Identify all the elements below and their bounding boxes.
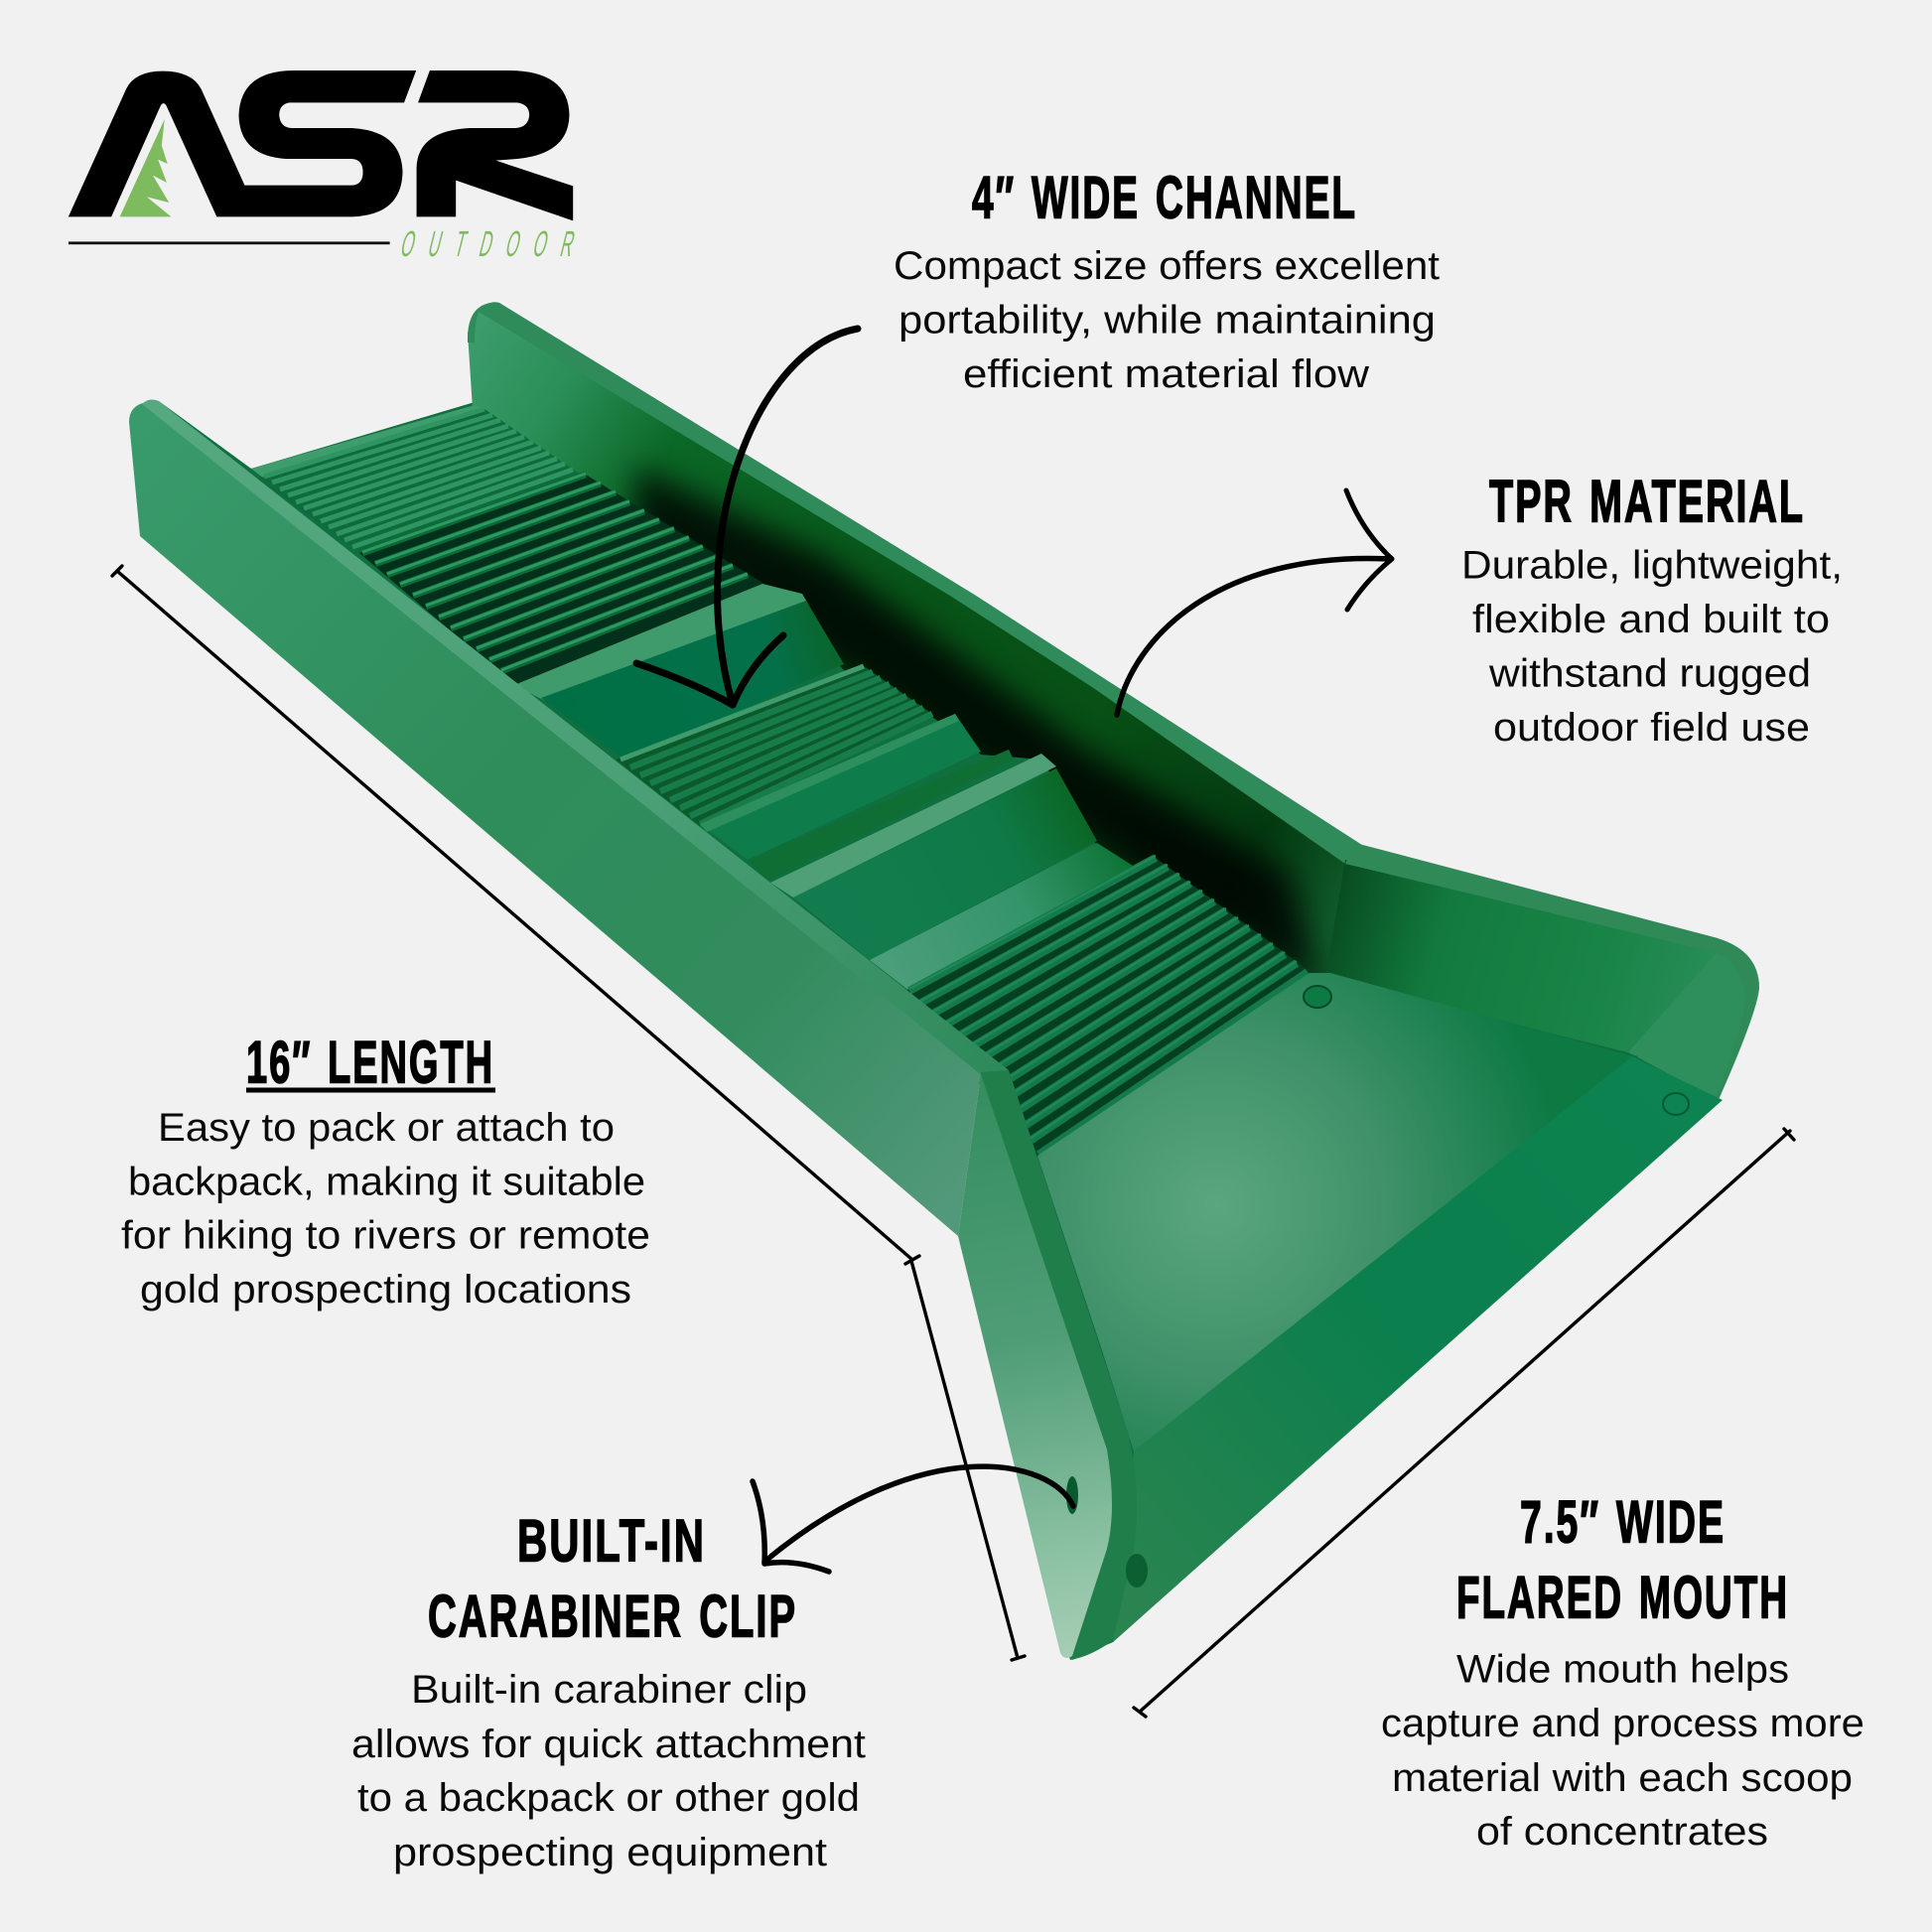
riffle section 2 bbox=[359, 474, 764, 685]
back edge strip bbox=[251, 405, 484, 479]
step strip after section 2 bbox=[514, 584, 809, 701]
description: Easy to pack or attach to bbox=[158, 1106, 615, 1150]
logo letters A and S bbox=[69, 70, 416, 216]
floor base bbox=[238, 405, 1638, 1459]
thin riffle bar bbox=[748, 750, 1014, 881]
mouth floor bbox=[1037, 973, 1632, 1451]
light step bbox=[870, 843, 1133, 991]
far wall end cap bbox=[1628, 946, 1759, 1100]
icon: green pine tree bbox=[120, 119, 171, 216]
description bbox=[351, 1668, 866, 1874]
callout: 4 inch wide channel bbox=[894, 165, 1440, 396]
description bbox=[1381, 1648, 1864, 1854]
measure line: carabiner side bbox=[911, 1261, 1025, 1660]
riffle section 3 bbox=[616, 666, 932, 826]
description: backpack, making it suitable bbox=[128, 1160, 645, 1203]
sluice silhouette base bbox=[159, 303, 1759, 1660]
floor rivet left bbox=[1304, 986, 1331, 1008]
description: capture and process more bbox=[1381, 1702, 1864, 1745]
description: Compact size offers excellent bbox=[894, 244, 1440, 288]
description: withstand rugged bbox=[1488, 651, 1811, 695]
heading: CARABINER CLIP bbox=[428, 1583, 797, 1650]
far wall shadow bbox=[635, 467, 1320, 993]
description bbox=[121, 1106, 650, 1311]
measure line: 16 inch length bbox=[112, 566, 919, 1264]
heading bbox=[428, 1507, 797, 1650]
description: outdoor field use bbox=[1493, 706, 1810, 750]
arrow: to TPR material bbox=[1117, 490, 1392, 715]
description: flexible and built to bbox=[1472, 598, 1830, 641]
description: allows for quick attachment bbox=[351, 1723, 866, 1766]
floor step A bbox=[541, 601, 844, 761]
description: gold prospecting locations bbox=[140, 1268, 631, 1311]
far wall rim bbox=[468, 302, 1365, 864]
heading: 4″ WIDE CHANNEL bbox=[972, 165, 1357, 230]
lower rivet bbox=[1126, 1554, 1148, 1587]
callout: built-in carabiner clip bbox=[351, 1507, 866, 1874]
carabiner hole bbox=[1066, 1476, 1078, 1514]
description: Wide mouth helps bbox=[1456, 1648, 1789, 1692]
description: Durable, lightweight, bbox=[1461, 544, 1843, 588]
lip rivet bbox=[1663, 1093, 1689, 1115]
arrow: to channel bbox=[636, 329, 858, 705]
heading underline bbox=[246, 1088, 495, 1092]
heading: 16″ LENGTH bbox=[246, 1029, 494, 1096]
description: prospecting equipment bbox=[393, 1831, 827, 1874]
callout: 16 inch length bbox=[121, 1029, 650, 1311]
callout: TPR material bbox=[1461, 469, 1843, 750]
step B highlight bbox=[700, 714, 959, 832]
description: to a backpack or other gold bbox=[357, 1776, 860, 1820]
description: for hiking to rivers or remote bbox=[121, 1213, 650, 1257]
callout: 7.5 inch wide flared mouth bbox=[1381, 1489, 1864, 1854]
flared wall inner strip bbox=[981, 1070, 1137, 1660]
step face bbox=[793, 768, 1097, 960]
heading: BUILT-IN bbox=[517, 1507, 706, 1575]
description bbox=[1461, 544, 1843, 750]
floor step B bbox=[700, 714, 981, 860]
mouth front lip bbox=[1113, 1056, 1723, 1642]
far wall interior bbox=[468, 310, 1345, 993]
logo underline bbox=[69, 241, 390, 244]
description: material with each scoop bbox=[1392, 1756, 1853, 1800]
flared far wall bbox=[1325, 860, 1724, 1097]
heading bbox=[1456, 1489, 1789, 1630]
near wall lip bbox=[142, 400, 1009, 1074]
logo letter R bbox=[417, 70, 573, 220]
measure line: 7.5 inch mouth bbox=[1134, 1129, 1794, 1717]
logo: ASR Outdoor bbox=[69, 70, 579, 265]
description: Built-in carabiner clip bbox=[411, 1668, 807, 1712]
flared far rim bbox=[1345, 843, 1759, 1102]
logo word OUTDOOR: OUTDOOR bbox=[397, 225, 579, 265]
description: efficient material flow bbox=[963, 352, 1369, 396]
riffle section 4 bbox=[905, 856, 1311, 1157]
description: of concentrates bbox=[1476, 1810, 1768, 1854]
light step strip bbox=[770, 754, 1056, 897]
near wall face bbox=[129, 402, 981, 1236]
heading: 7.5″ WIDE bbox=[1520, 1489, 1725, 1555]
description: portability, while maintaining bbox=[898, 298, 1436, 342]
flared wall outer face bbox=[958, 1074, 1112, 1658]
arrow: to carabiner clip bbox=[753, 1466, 1073, 1572]
sluice box product image bbox=[129, 302, 1759, 1660]
riffle section 1 bbox=[258, 409, 581, 553]
description bbox=[894, 244, 1440, 396]
